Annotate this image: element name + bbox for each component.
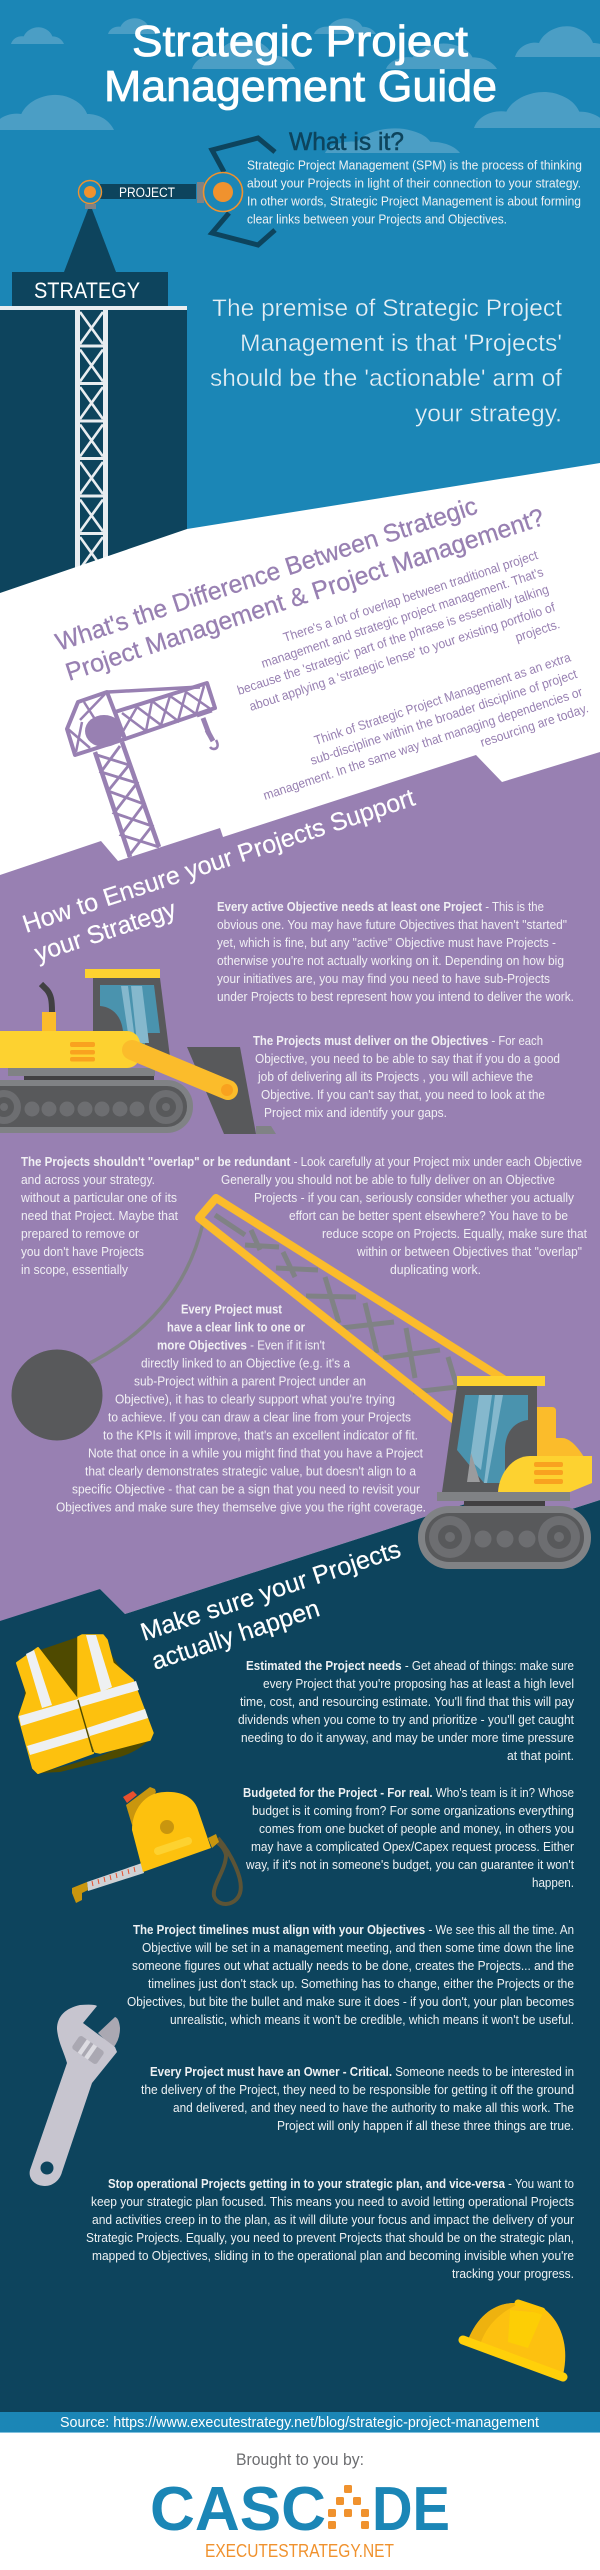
text block: budgeted: Budgeted for the Project - For real. Who's team is it in? Whose [243,1785,574,1800]
text block: clear link: have a clear link to one or [167,1319,305,1334]
text block: overlap: and across your strategy. [21,1172,155,1187]
difference paragraphs: resourcing are today. [478,700,590,750]
text block: every objective: under Projects to best represent how you intend to deliver the work. [217,989,574,1004]
text block: clear link: that clearly demonstrates strategic value, but doesn't align to a [85,1463,417,1478]
heading: ensure support: How to Ensure your Projects Support [19,784,418,939]
text block: every objective: your initiatives are, you may find you need to have sub-Projects [217,971,550,986]
text block: stop operational: keep your strategic plan focused. This means you need to avoid letting operational Projects [91,2194,574,2209]
text block: overlap: duplicating work. [390,1262,481,1277]
text block: deliver on objectives: Objective. If you can't say that, you need to look at the [261,1087,545,1102]
text block: owner: Every Project must have an Owner - Critical. Someone needs to be interested in [150,2064,574,2079]
text block: deliver on objectives: job of delivering all its Projects , you will achieve the [257,1069,533,1084]
intro paragraph: about your Projects in light of their connection to your strategy. [247,175,581,190]
text block: every objective: obvious one. You may have future Objectives that haven't "started" [217,917,567,932]
icon: excavator [418,1376,592,1569]
text block: overlap: you don't have Projects [21,1244,144,1259]
logo: cascade: CASC [150,2475,326,2544]
text block: owner: Project will only happen if all these three things are true. [277,2118,574,2133]
text block: owner: the delivery of the Project, they need to be responsible for getting it off the ground [141,2082,574,2097]
text block: deliver on objectives: The Projects must deliver on the Objectives - For each [253,1033,543,1048]
text block: every objective: Every active Objective needs at least one Project - This is the [217,899,544,914]
premise statement: Management is that 'Projects' [240,330,562,357]
text block: owner: and delivered, and they need to have the authority to make all this work. The [173,2100,574,2115]
crane arm with project label: PROJECT [119,185,175,200]
text block: clear link: Objectives and make sure they themselve give you the right coverage. [56,1499,426,1514]
text block: timelines: timelines just don't stack up. Something has to change, either the Projects or the [148,1976,574,1991]
intro paragraph: Strategic Project Management (SPM) is the process of thinking [247,157,582,172]
text block: owner [141,2064,574,2133]
text block: deliver on objectives [253,1033,560,1120]
text block: clear link: sub-Project within a parent Project under an [134,1373,366,1388]
text block: stop operational [86,2176,575,2281]
heading: difference: Project Management & Project Management? [62,503,548,687]
intro paragraph: clear links between your Projects and Objectives. [247,211,507,226]
premise statement: The premise of Strategic Project [212,295,562,322]
text block: timelines [127,1922,574,2027]
text block: clear link: Note that once in a while you might find that you have a Project [88,1445,423,1460]
text block: clear link: Every Project must [181,1301,283,1316]
text block: deliver on objectives: Project mix and identify your gaps. [264,1105,447,1120]
text block: estimated: at that point. [507,1748,574,1763]
text block: overlap: Generally you should not be able to fully deliver on an Objective [221,1172,555,1187]
icon: tower crane [67,683,218,857]
intro paragraph [247,157,582,226]
difference paragraphs: management and strategic project management. That's [259,564,546,671]
premise statement [210,295,562,428]
text block: overlap: need that Project. Maybe that [21,1208,178,1223]
difference paragraphs: sub-discipline within the broader discipline of project [308,666,579,768]
text block: timelines: Objective will be set in a management meeting, and then some time down the line [142,1940,574,1955]
panel: white difference section [0,463,600,900]
text block: every objective [217,899,574,1004]
panel: dark happen section [0,1500,600,2412]
text block: overlap: in scope, essentially [21,1262,128,1277]
difference paragraphs: about applying a 'strategic lense' to your existing portfolio of [247,599,557,714]
title: Strategic Project [132,17,468,66]
heading: ensure support: your Strategy [31,895,180,968]
strategy tower [0,272,187,600]
text block: budgeted: happen. [532,1875,574,1890]
source band [0,2412,600,2433]
text block: estimated: needing to do it anyway, and may be under more time pressure [241,1730,574,1745]
text block: overlap: without a particular one of its [20,1190,177,1205]
text block: estimated: Estimated the Project needs - Get ahead of things: make sure [246,1658,574,1673]
icon: wrecking crane boom and ball [12,1198,505,1440]
text block: stop operational: and activities creep in to the plan, as it will dilute your focus and impact the delivery of your [92,2212,575,2227]
strategy tower: STRATEGY [34,278,140,303]
heading: make sure: Make sure your Projects [137,1535,404,1647]
text block: budgeted: budget is it coming from? For some organizations everything [252,1803,574,1818]
header background [0,0,600,800]
heading: what is it: What is it? [289,128,404,156]
logo: cascade: DE [372,2475,450,2544]
text block: clear link: to achieve. If you can draw a clear line from your Projects [108,1409,411,1424]
text block: estimated: every Project that you're proposing has at least a high level [263,1676,574,1691]
panel: purple support section [0,752,600,1640]
crane arm with project label [64,138,275,272]
text block: estimated [238,1658,574,1763]
intro paragraph: In other words, Strategic Project Management is about forming [247,193,581,208]
text block: clear link: specific Objective - that can be a sign that you need to revisit your [72,1481,421,1496]
text block: overlap: within or between Objectives that "overlap" [356,1244,582,1259]
text block: overlap: effort can be better spent elsewhere? You have to be [289,1208,568,1223]
icon: bulldozer [0,969,276,1134]
icon: hard hat [463,2303,565,2377]
difference paragraphs: There's a lot of overlap between traditional project [281,547,540,645]
text block: budgeted: may have a complicated Opex/Capex request process. Either [251,1839,575,1854]
text block: clear link: more Objectives - Even if it isn't [157,1337,325,1352]
text block: budgeted: way, if it's not in someone's budget, you can guarantee it won't [245,1857,574,1872]
text block: timelines: someone figures out what actually needs to be done, creates the Projects... and the [132,1958,574,1973]
clouds [0,18,600,153]
text block: estimated: time, cost, and resourcing estimate. You'll find that this will pay [240,1694,574,1709]
difference paragraphs [235,547,590,803]
text block: overlap: prepared to remove or [21,1226,140,1241]
text block: deliver on objectives: Objective, you need to be able to say that if you do a good [255,1051,560,1066]
text block: stop operational: Stop operational Projects getting in to your strategic plan, and vice-versa - You want to [108,2176,574,2191]
icon: wrench [30,2005,120,2186]
title [104,17,497,111]
text block: timelines: unrealistic, which means it won't be credible, which means it won't be useful. [170,2012,574,2027]
heading: difference: What's the Difference Between Strategic [52,492,481,657]
difference paragraphs: projects. [513,616,562,645]
text block: every objective: otherwise you're not actually working on it. Depending on how big [217,953,564,968]
text block: every objective: yet, which is fine, but any "active" Objective must have Projects - [217,935,556,950]
text block: clear link [56,1301,426,1514]
premise statement: should be the 'actionable' arm of [210,365,562,392]
difference paragraphs: because the 'strategic' part of the phrase is essentially talking [235,581,551,698]
title: Management Guide [104,62,497,111]
text block: estimated: dividends when you come to try and prioritize - you'll get caught [238,1712,574,1727]
text block: clear link: directly linked to an Objective (e.g. it's a [141,1355,351,1370]
text block: budgeted [243,1785,575,1890]
text block: overlap: Projects - if you can, seriously consider whether you actually [254,1190,574,1205]
text block: clear link: to the KPIs it will improve, that's an excellent indicator of fit. [103,1427,418,1442]
text block: timelines: The Project timelines must align with your Objectives - We see this all the time. An [133,1922,574,1937]
premise statement: your strategy. [415,400,562,428]
text block: budgeted: comes from one bucket of people and money, in others you [259,1821,574,1836]
logo: cascade [150,2475,450,2544]
icon: tape measure [72,1787,241,1904]
website: EXECUTESTRATEGY.NET [205,2540,394,2561]
difference paragraphs: Think of Strategic Project Management as an extra [312,649,573,748]
text block: overlap [20,1154,587,1277]
text block: clear link: Objective), it has to clearly support what you're trying [115,1391,395,1406]
heading: make sure: actually happen [148,1594,323,1676]
source band: Source: https://www.executestrategy.net/blog/strategic-project-management [60,2414,540,2431]
brought to you by: Brought to you by: [236,2450,364,2469]
text block: stop operational: tracking your progress. [452,2266,574,2281]
icon: safety vest [17,1635,153,1773]
